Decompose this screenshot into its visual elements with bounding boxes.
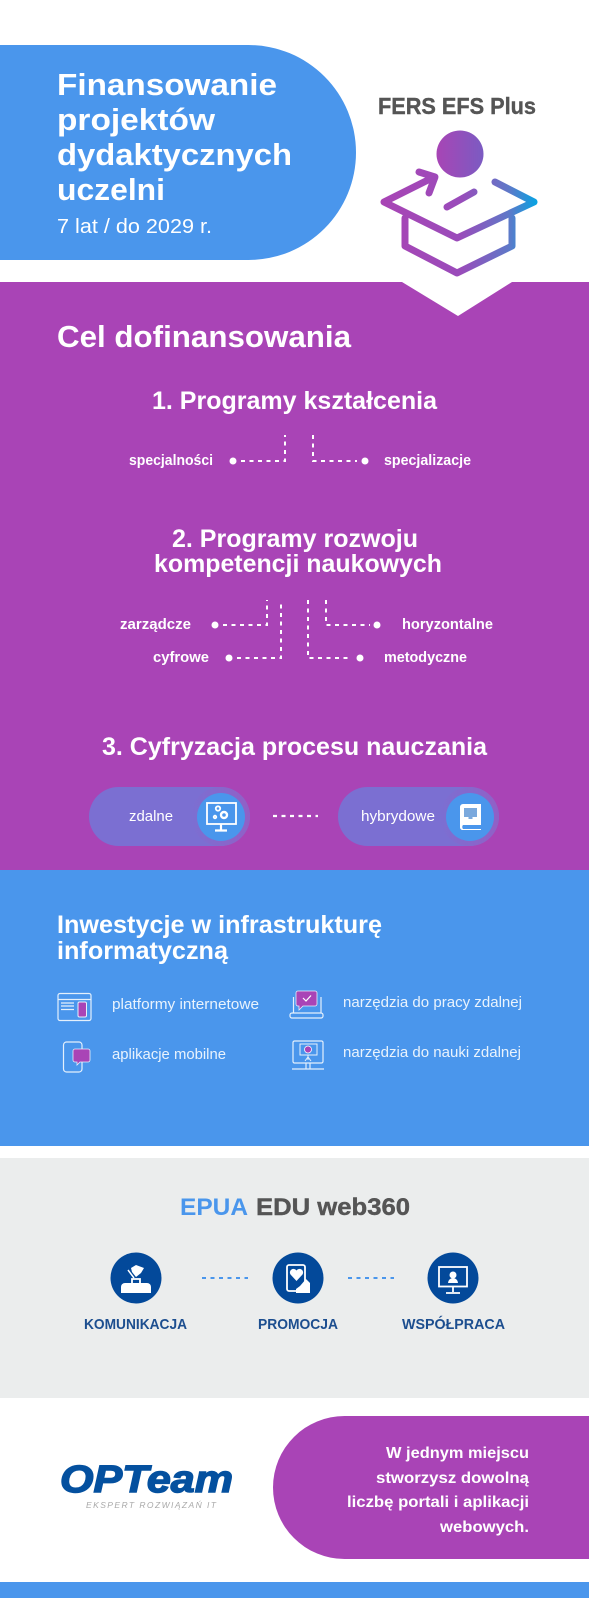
- icon: book with screen: [460, 804, 481, 830]
- connector dashes: [273, 815, 318, 817]
- heading: infrastructure: [57, 911, 382, 965]
- callout: purple pill: webowych.: [439, 1519, 529, 1536]
- item: mobile apps: aplikacje mobilne: [112, 1046, 226, 1063]
- item: remote learning tools: [292, 1041, 521, 1069]
- pill: hybrid: hybrydowe: [361, 808, 435, 825]
- subtitle: 7 lat / do 2029 r.: [57, 216, 212, 238]
- connector dashes: [202, 1277, 394, 1279]
- diagram: competences: [120, 600, 493, 666]
- pill: hybrid: [338, 787, 499, 846]
- subheading 3: 3. Cyfryzacja procesu nauczania: [102, 733, 488, 761]
- title: dydaktycznych: [57, 137, 292, 172]
- callout: purple pill: [273, 1416, 589, 1559]
- title: [57, 67, 292, 207]
- subheading 2: 2. Programy rozwoju: [172, 525, 418, 553]
- heading: product name: EDU web360: [256, 1194, 410, 1221]
- item: web platforms: platformy internetowe: [112, 996, 259, 1013]
- diagram: competences: metodyczne: [384, 649, 467, 666]
- item: remote work tools: [290, 991, 522, 1018]
- logo tagline: EKSPERT ROZWIĄZAŃ IT: [86, 1500, 217, 1510]
- feature: cooperation: WSPÓŁPRACA: [402, 1315, 505, 1333]
- icon: monitor with gears: [207, 803, 236, 830]
- feature: communication: KOMUNIKACJA: [84, 1316, 187, 1333]
- heading: product name: EPUA: [180, 1194, 248, 1221]
- heading: product name: [180, 1194, 410, 1221]
- item: web platforms: [58, 994, 259, 1020]
- diagram: competences: cyfrowe: [153, 649, 209, 666]
- item: remote work tools: narzędzia do pracy zdalnej: [343, 994, 522, 1011]
- panel: purple goal section: [0, 282, 589, 870]
- callout: purple pill: W jednym miejscu: [386, 1445, 529, 1462]
- callout: purple pill: stworzysz dowolną: [376, 1470, 529, 1487]
- feature: communication: [84, 1252, 187, 1333]
- title: projektów: [57, 102, 216, 137]
- diagram: competences: horyzontalne: [402, 616, 493, 633]
- subheading 2: [154, 525, 442, 578]
- heading: goal: Cel dofinansowania: [57, 319, 352, 354]
- subheading 1: 1. Programy kształcenia: [152, 387, 438, 415]
- panel: IT infrastructure: [0, 870, 589, 1146]
- diagram: competences: zarządcze: [120, 616, 191, 633]
- feature: promotion: [258, 1252, 338, 1333]
- footer bar: [0, 1582, 589, 1598]
- item: mobile apps: [64, 1042, 226, 1072]
- program name: FERS EFS Plus: [378, 93, 536, 119]
- header pill: blue: [0, 45, 356, 260]
- diagram: study programmes: [129, 435, 471, 469]
- heading: infrastructure: Inwestycje w infrastrukturę: [57, 911, 382, 939]
- subheading 2: kompetencji naukowych: [154, 550, 442, 578]
- item: remote learning tools: narzędzia do nauki zdalnej: [343, 1044, 521, 1061]
- feature: promotion: PROMOCJA: [258, 1316, 338, 1333]
- feature: cooperation: [402, 1252, 505, 1333]
- title: uczelni: [57, 172, 165, 207]
- callout: purple pill: liczbę portali i aplikacji: [347, 1494, 529, 1511]
- logo: OPTeam: OPTeam: [60, 1459, 233, 1501]
- pill: remote: zdalne: [129, 808, 173, 825]
- diagram: study programmes: specjalizacje: [384, 452, 471, 469]
- diagram: study programmes: specjalności: [129, 452, 213, 469]
- heading: infrastructure: informatyczną: [57, 937, 229, 965]
- panel: EPUA EDU web360: [0, 1158, 589, 1398]
- title: Finansowanie: [57, 67, 277, 102]
- pill: remote: [89, 787, 250, 846]
- icon: open box with coin: [384, 130, 534, 273]
